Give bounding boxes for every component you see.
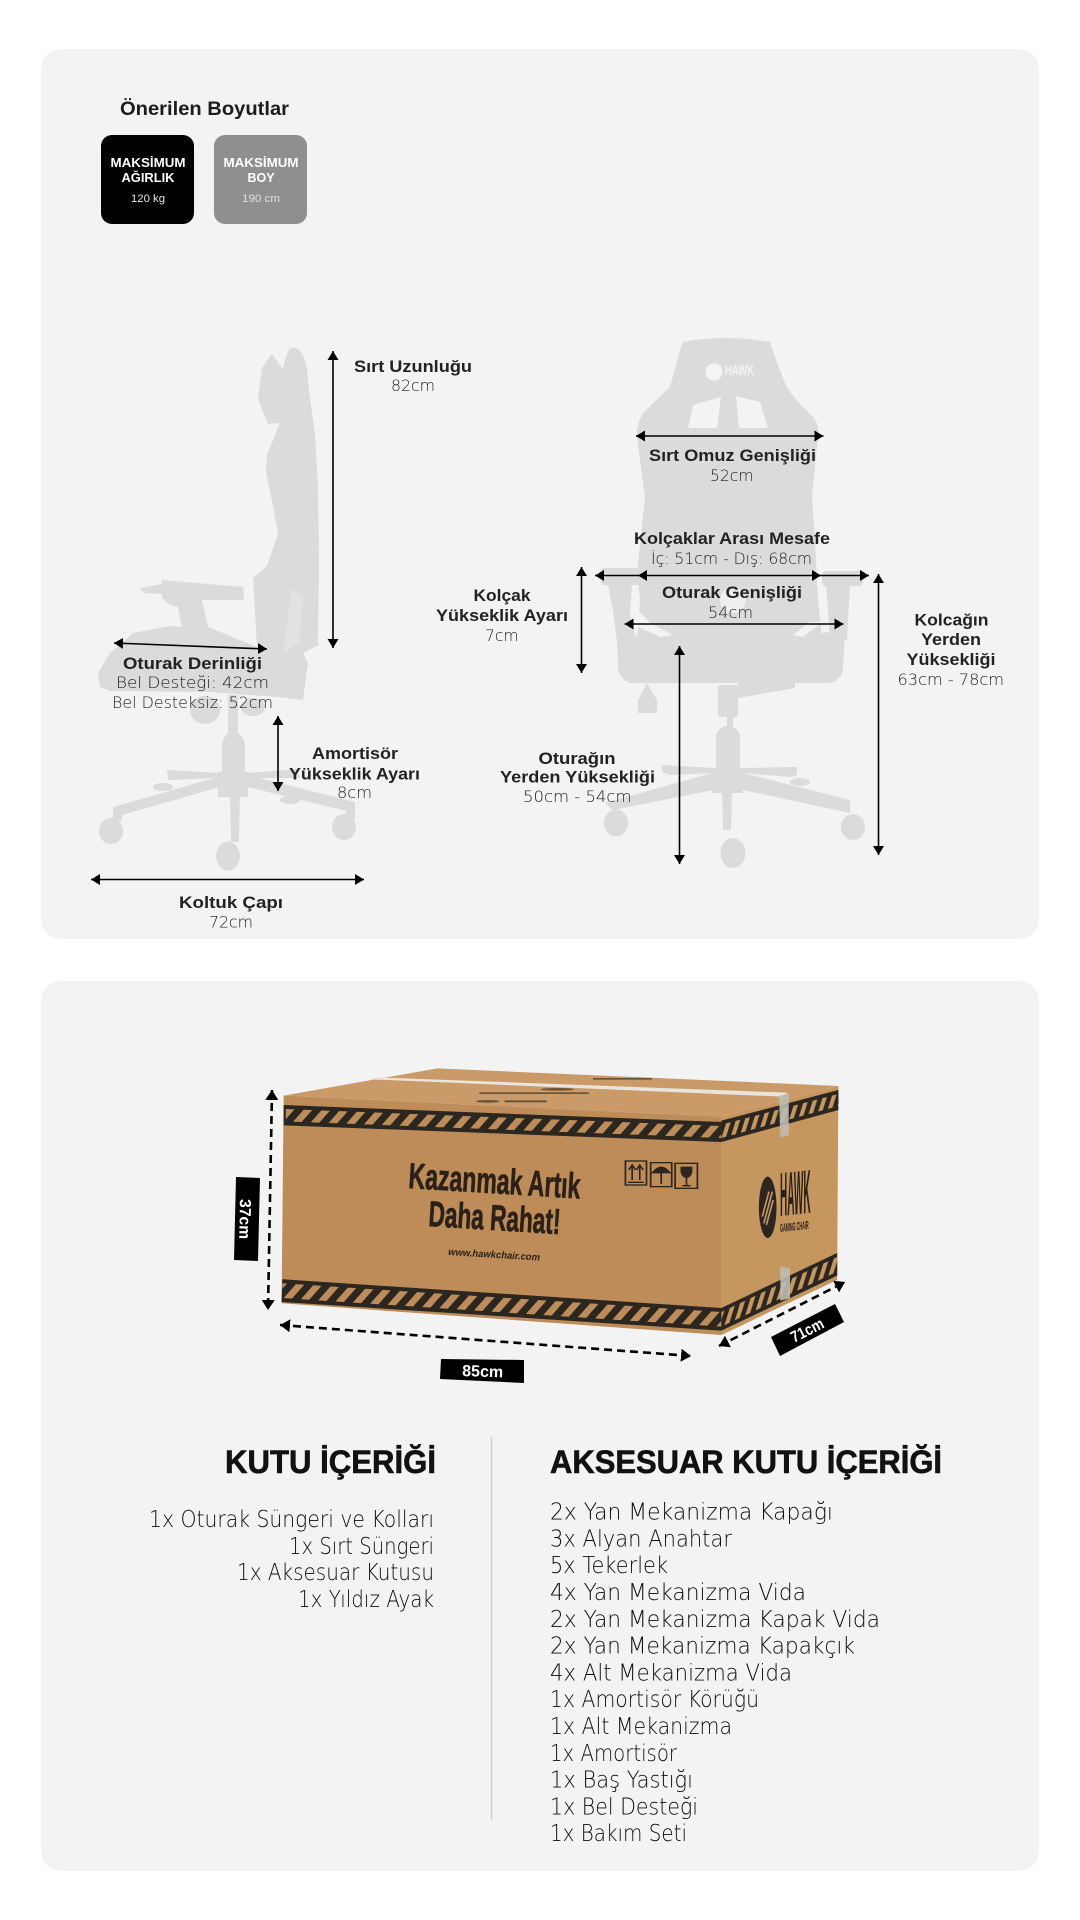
label: distance between armrests: İç: 51cm - Dış: 68cm	[651, 549, 812, 568]
list: accessory box contents: 5x Tekerlek	[550, 1553, 668, 1579]
arrow: back length	[332, 351, 334, 648]
card: maximum weight	[101, 135, 194, 224]
box front face	[282, 1096, 721, 1335]
box slogan: www.hawkchair.com	[448, 1247, 540, 1264]
divider	[490, 1437, 492, 1820]
label: chair diameter	[179, 894, 283, 932]
label: seat depth: Bel Desteği: 42cm	[116, 673, 269, 692]
box top face	[284, 1068, 838, 1117]
label: seat width: 54cm	[708, 603, 753, 622]
list: accessory box contents: 4x Alt Mekanizma Vida	[550, 1660, 792, 1686]
illustration: cardboard box	[282, 1068, 838, 1335]
arrow: chair diameter	[91, 878, 364, 880]
label: armrest height from floor: Yerden	[921, 631, 981, 649]
hazard band: front bottom	[282, 1279, 721, 1331]
box tape	[370, 1077, 787, 1097]
label: armrest height from floor: 63cm - 78cm	[898, 670, 1004, 689]
list: accessory box contents: 1x Bakım Seti	[550, 1821, 687, 1847]
heading: box contents: KUTU İÇERİĞİ	[225, 1444, 436, 1480]
list: accessory box contents: 4x Yan Mekanizma Vida	[550, 1580, 806, 1606]
label: armrest height from floor: Yüksekliği	[906, 651, 996, 669]
list: box contents	[149, 1507, 434, 1613]
arrow: seat depth	[114, 643, 267, 649]
box slogan: Daha Rahat!	[428, 1193, 562, 1242]
card: maximum height: 190 cm	[242, 193, 280, 205]
label: armrest height adjustment	[436, 587, 568, 645]
label: seat height from floor: Yerden Yüksekliği	[500, 768, 655, 786]
label: seat width	[662, 584, 802, 622]
arrows: armrest distance	[595, 574, 869, 576]
handling icons	[625, 1161, 697, 1188]
dashed arrow: box height	[268, 1090, 272, 1310]
list: accessory box contents: 1x Amortisör	[550, 1741, 677, 1767]
list: box contents: 1x Aksesuar Kutusu	[237, 1560, 434, 1586]
label: back length	[354, 358, 472, 395]
dashed arrow: box depth	[719, 1282, 845, 1346]
list: box contents: 1x Oturak Süngeri ve Kolları	[149, 1507, 434, 1533]
list: accessory box contents: 1x Baş Yastığı	[550, 1768, 693, 1794]
box slogan	[408, 1155, 582, 1264]
card: maximum height: MAKSİMUM	[224, 155, 298, 170]
label: box depth	[771, 1304, 844, 1356]
list: accessory box contents: 2x Yan Mekanizma Kapakçık	[550, 1634, 855, 1660]
label: seat depth	[112, 655, 273, 712]
box side logo text: GAMING CHAIR	[780, 1219, 809, 1235]
illustration: front view chair silhouette	[601, 338, 865, 868]
label: gas lift adjustment: Amortisör	[312, 745, 399, 763]
arrow: shoulder width	[636, 435, 824, 437]
list: accessory box contents: 1x Amortisör Körüğü	[550, 1687, 759, 1713]
label: seat depth: Bel Desteksiz: 52cm	[112, 693, 273, 712]
arrow: armrest height from floor	[878, 574, 880, 855]
label: back length: 82cm	[391, 376, 435, 395]
label: box width: 85cm	[462, 1363, 503, 1381]
label: gas lift adjustment: 8cm	[337, 783, 372, 802]
label: chair diameter: Koltuk Çapı	[179, 894, 283, 912]
label: box height	[234, 1177, 260, 1261]
label: shoulder width: Sırt Omuz Genişliği	[649, 447, 816, 465]
label: armrest height adjustment: Kolçak	[474, 587, 531, 605]
box side logo text: HAWK	[780, 1158, 811, 1230]
side logo emblem	[759, 1177, 777, 1238]
label: seat width: Oturak Genişliği	[662, 584, 802, 602]
hazard band: side bottom	[721, 1253, 837, 1331]
label: distance between armrests: Kolçaklar Arası Mesafe	[634, 530, 830, 548]
arrow: armrest height adjustment	[580, 567, 582, 673]
label: distance between armrests	[634, 530, 830, 568]
card: maximum height	[214, 135, 307, 224]
label: armrest height from floor	[898, 612, 1004, 689]
card: maximum weight: 120 kg	[131, 193, 165, 205]
box side tape	[779, 1093, 790, 1301]
label: gas lift adjustment: Yükseklik Ayarı	[289, 766, 420, 784]
illustration: side view chair silhouette	[98, 348, 356, 870]
label: seat depth: Oturak Derinliği	[123, 655, 262, 673]
card: maximum weight: MAKSİMUM	[110, 155, 186, 170]
label: shoulder width	[649, 447, 816, 485]
arrow: gas lift adjustment	[277, 716, 279, 791]
card: maximum height: BOY	[248, 170, 275, 185]
box top print	[476, 1078, 652, 1103]
card: maximum weight: AĞIRLIK	[122, 170, 175, 185]
label: gas lift adjustment	[289, 745, 420, 802]
list: accessory box contents: 1x Alt Mekanizma	[550, 1714, 732, 1740]
list: box contents: 1x Sırt Süngeri	[289, 1534, 434, 1560]
label: seat height from floor: 50cm - 54cm	[523, 787, 632, 806]
arrow: seat height from floor	[678, 646, 680, 864]
label: shoulder width: 52cm	[710, 466, 754, 485]
label: armrest height adjustment: 7cm	[485, 626, 518, 645]
heading: recommended sizes: Önerilen Boyutlar	[120, 99, 290, 120]
arrow: seat width	[624, 623, 844, 625]
panel: box and contents	[41, 981, 1039, 1871]
list: accessory box contents: 2x Yan Mekanizma Kapak Vida	[550, 1607, 880, 1633]
label: seat height from floor: Oturağın	[538, 750, 616, 768]
list: accessory box contents: 2x Yan Mekanizma Kapağı	[550, 1500, 833, 1526]
label: back length: Sırt Uzunluğu	[354, 358, 472, 376]
hazard band: front top	[284, 1105, 721, 1142]
illustration: front view chair silhouette: HAWK	[725, 362, 754, 379]
hazard band: side top	[721, 1090, 838, 1142]
box right face	[721, 1086, 838, 1335]
list: accessory box contents: 1x Bel Desteği	[550, 1794, 698, 1820]
box slogan: Kazanmak Artık	[408, 1155, 582, 1207]
label: seat height from floor	[500, 750, 655, 806]
heading: accessory box contents: AKSESUAR KUTU İÇERİĞİ	[550, 1444, 942, 1480]
list: box contents: 1x Yıldız Ayak	[298, 1587, 434, 1613]
panel: recommended dimensions	[41, 49, 1039, 939]
dashed arrow: box width	[280, 1325, 691, 1356]
list: accessory box contents: 3x Alyan Anahtar	[550, 1526, 732, 1552]
label: armrest height adjustment: Yükseklik Ayarı	[436, 607, 568, 625]
label: box width	[440, 1359, 524, 1383]
list: accessory box contents	[550, 1500, 880, 1847]
label: armrest height from floor: Kolcağın	[914, 612, 988, 630]
label: box depth: 71cm	[788, 1316, 827, 1347]
label: box height: 37cm	[235, 1199, 253, 1239]
label: chair diameter: 72cm	[209, 912, 253, 932]
